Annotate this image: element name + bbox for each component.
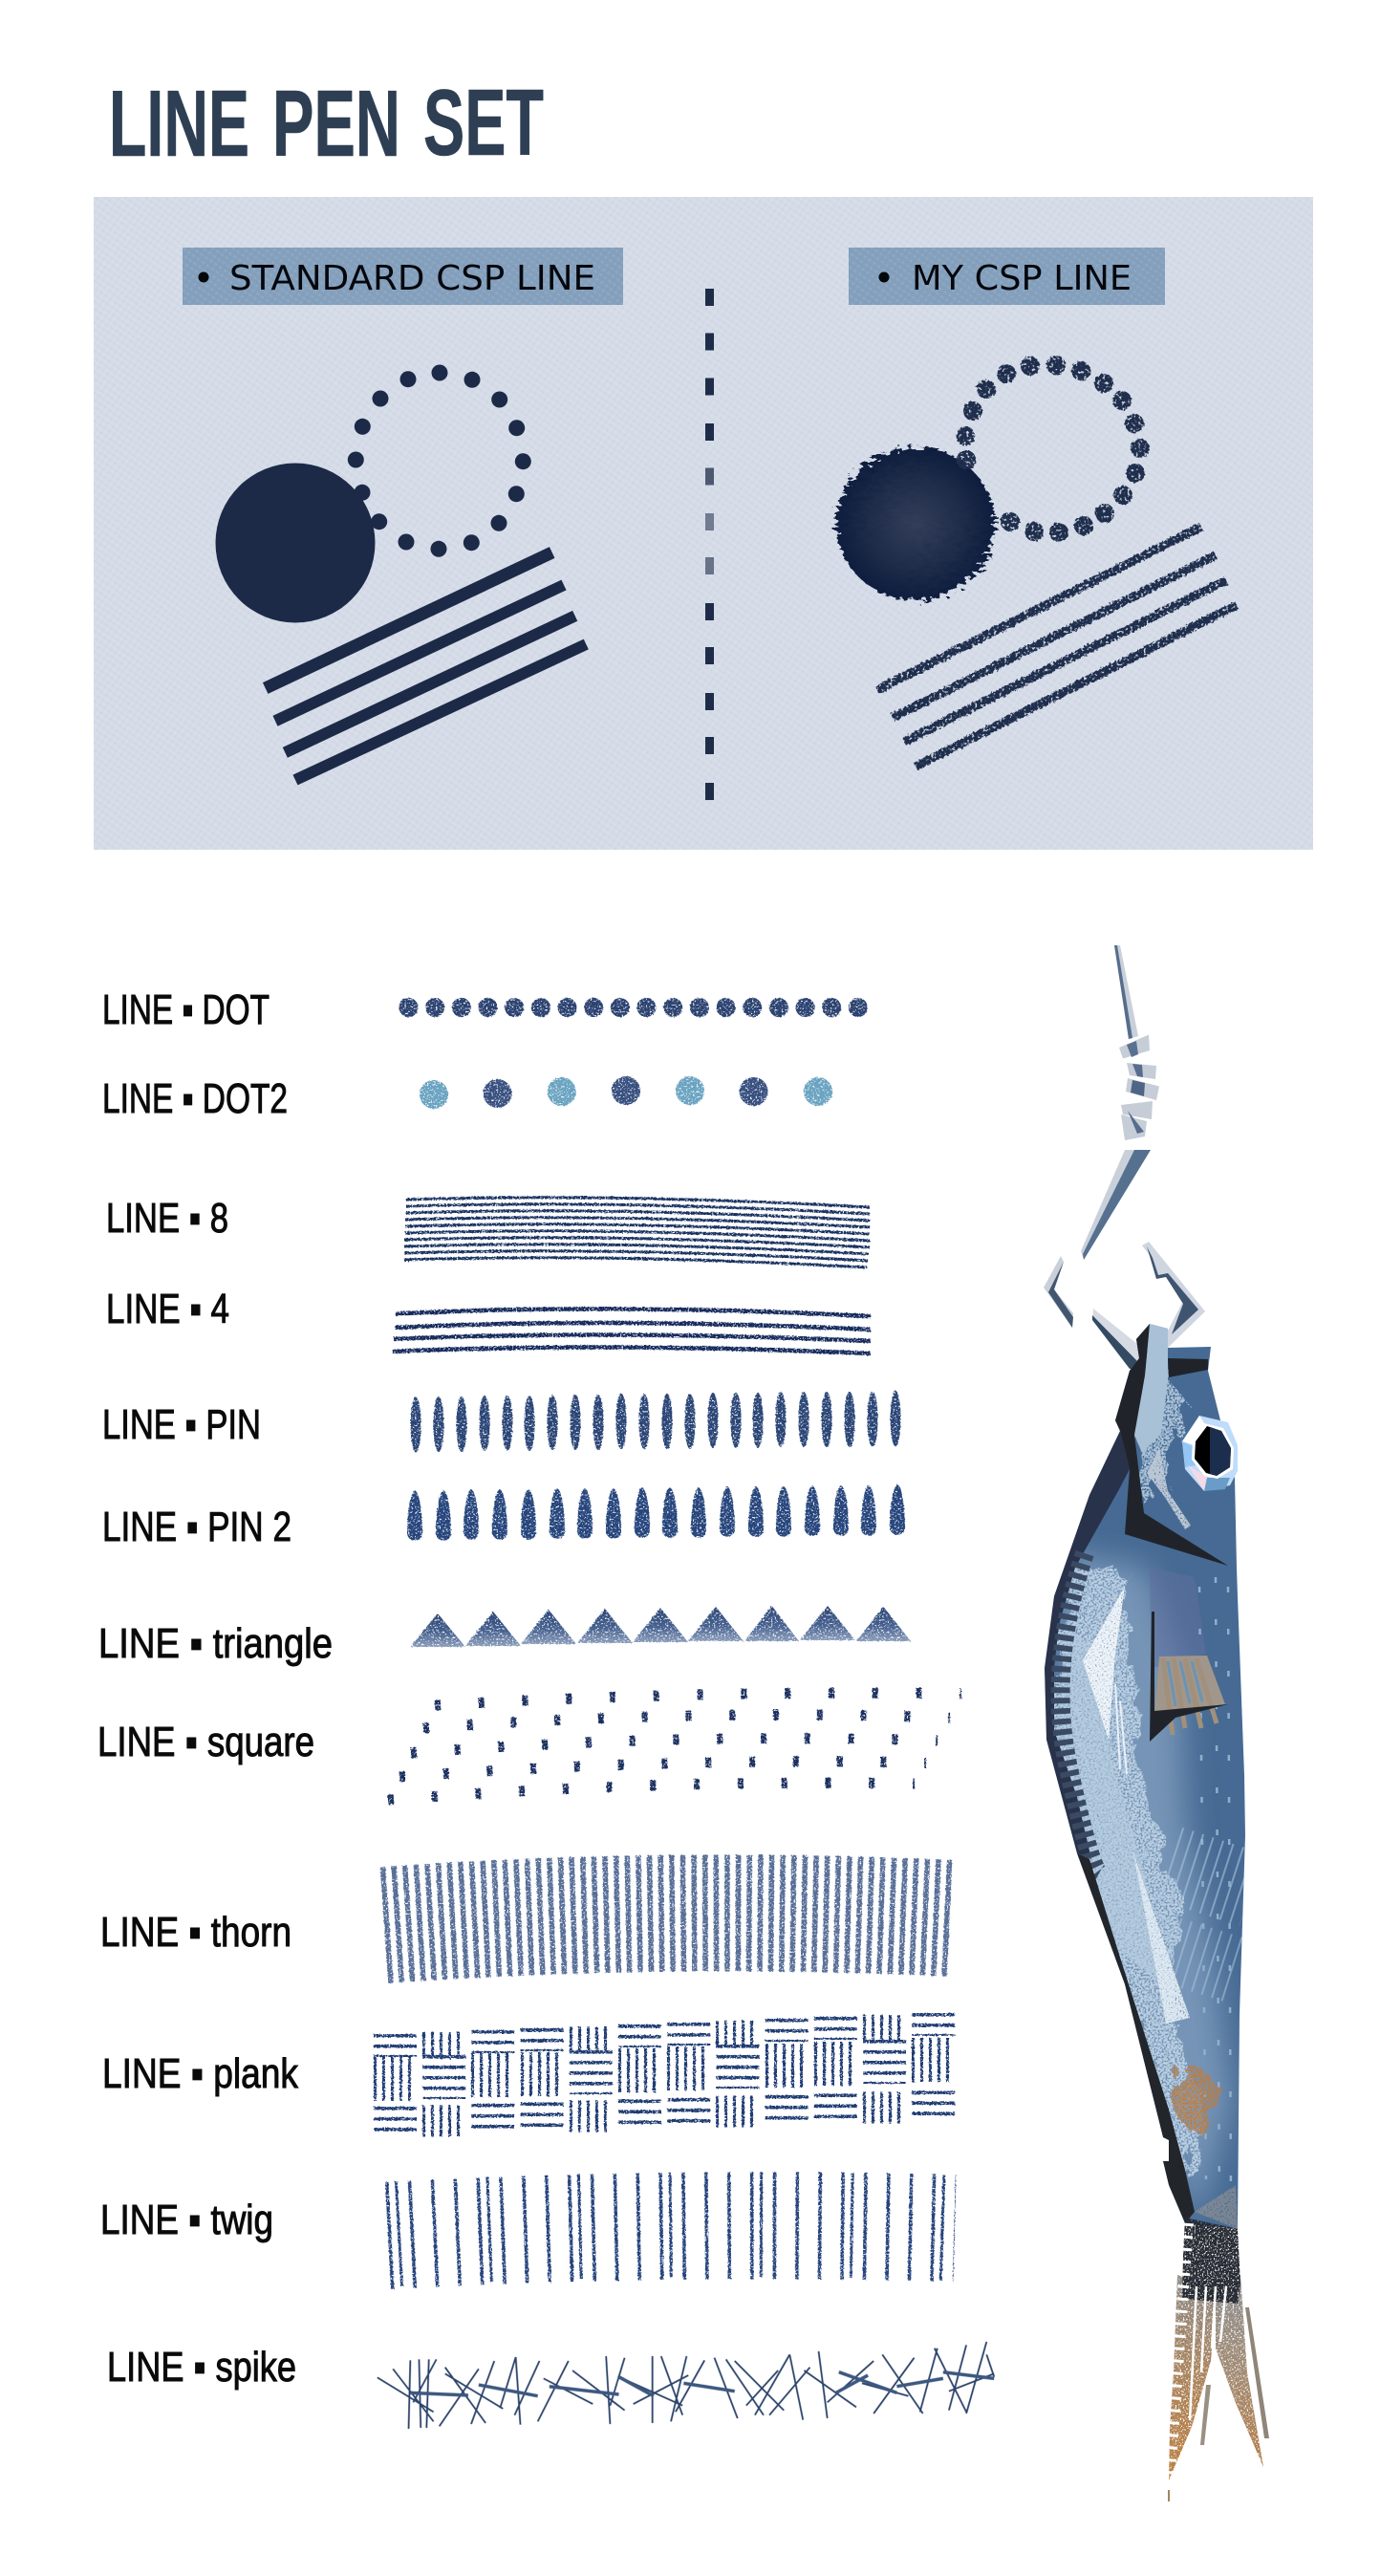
label: LINE plank: LINE ▪ plank [102,2050,299,2097]
sample: four-stroke lines [393,1309,871,1353]
purple tint on shoulder [1150,1568,1206,1668]
sample: eight-stroke lines [404,1198,870,1267]
vertical planks bottom row [422,2108,906,2121]
my line: rough filled blob [836,447,995,600]
hook shaft [1081,1150,1151,1260]
title: SET [423,70,544,175]
scale dash marks [1199,1577,1231,2208]
label: LINE triangle: LINE ▪ triangle [98,1620,333,1667]
vertical planks middle row [374,2060,955,2079]
vertical planks top row [422,2028,906,2046]
pectoral fin tan stripes [1154,1656,1225,1735]
pupil [1195,1426,1231,1476]
hook barb right [1142,1242,1205,1348]
sample: spike crossing lines [377,2342,994,2429]
label: LINE spike: LINE ▪ spike [107,2344,296,2391]
sample: twig stripes [388,2224,955,2236]
body shading [1045,1324,1251,2227]
horizontal plank blocks [396,2013,934,2137]
head streak highlight [1147,1448,1191,1529]
illustration: hanging fish [1044,945,1269,2501]
head bar [1168,1358,1208,1377]
hook barb left [1044,1256,1073,1328]
pectoral fin black base [1150,1612,1228,1742]
hook and line fragments [1044,945,1205,1369]
serrated teeth on back [1061,1553,1099,1873]
rough dotted ring [956,356,1150,542]
heading: my CSP line [849,248,1165,305]
heading: standard CSP line [183,248,623,305]
fish body [1045,1324,1245,2229]
label: LINE 4: LINE ▪ 4 [106,1286,229,1332]
title: LINE [109,71,249,176]
sample: plank basket weave [374,2013,955,2137]
eye [1182,1416,1238,1491]
title [109,70,544,176]
thin white streaks [1115,1684,1127,1774]
white lower belly wedge [1132,1851,1190,2024]
title: PEN [272,71,400,176]
sample: pin row [411,1391,900,1453]
sample: triangle row [410,1606,911,1647]
sample: dot row [409,998,858,1017]
label: LINE DOT2: LINE ▪ DOT2 [102,1075,288,1122]
midtone wash [1051,1548,1233,2227]
sample: dot2 row [420,1076,832,1109]
dark collar [1115,1324,1228,1566]
head highlight [1134,1324,1190,1504]
panel: standard vs my CSP line comparison [94,197,1313,850]
sample: square marks rows [388,1693,961,1800]
label: LINE DOT: LINE ▪ DOT [102,986,270,1033]
tail base dark [1182,2218,1240,2304]
fishing line top [1114,945,1138,1039]
label: LINE thorn: LINE ▪ thorn [100,1909,291,1956]
tan patch near tail [1195,2185,1238,2229]
heading: standard CSP line: STANDARD CSP LINE [229,259,595,298]
sample: thorn stripes [384,1913,953,1925]
tail fin right [1216,2275,1263,2467]
tail thin rays [1168,2307,1269,2501]
belly light grain [1051,1568,1199,2179]
tail white slashes [1190,2286,1226,2420]
brush stroke samples [374,1007,961,2236]
my line: rough dotted ring and lines [877,356,1237,767]
dashed centre divider [705,289,714,800]
white upper fin highlight [1083,1565,1137,1740]
navy back outline [1045,1431,1130,1859]
hook lower arm [1092,1309,1142,1369]
orange blotch [1174,2067,1216,2129]
rough parallel lines [877,527,1237,767]
label: LINE PIN: LINE ▪ PIN [102,1401,261,1448]
hatch strokes lower [1171,1950,1238,1971]
sample: pin 2 row [407,1484,905,1541]
four parallel lines [266,552,586,780]
pupil shaded half [1210,1427,1231,1476]
line wrap bands [1119,1034,1159,1140]
black belly strip [1077,1853,1195,2223]
solid belly highlight [1056,1625,1166,1988]
label: LINE PIN 2: LINE ▪ PIN 2 [102,1504,291,1550]
tail serrated notches [1170,2223,1188,2476]
tail fin left [1169,2275,1217,2480]
head light strip [1134,1324,1168,1453]
label: LINE 8: LINE ▪ 8 [106,1195,228,1242]
label: LINE twig: LINE ▪ twig [100,2197,273,2243]
standard line: dotted ring, filled circle, four lines [216,365,586,780]
label: LINE square: LINE ▪ square [97,1719,314,1765]
dotted ring [348,365,531,557]
heading: my CSP line: MY CSP LINE [912,259,1132,298]
hatch strokes upper [1171,1864,1251,1890]
filled circle [216,463,375,623]
